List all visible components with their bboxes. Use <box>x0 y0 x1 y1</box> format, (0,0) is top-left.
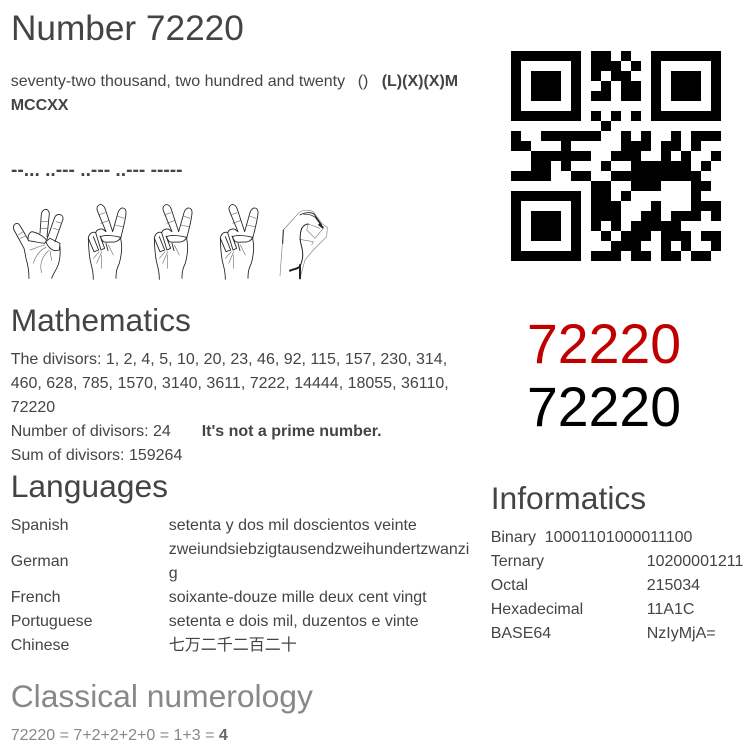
morse code: --... ..--- ..--- ..--- ----- <box>11 160 183 181</box>
table: languages: Portuguese <box>11 613 93 630</box>
icon: hand two, first <box>88 205 126 279</box>
table: informatics: 10001101000011100 <box>545 529 692 546</box>
table: informatics <box>491 529 743 642</box>
table: languages: setenta e dois mil, duzentos e vinte <box>169 613 419 630</box>
heading: informatics: Informatics <box>491 480 646 516</box>
number in words and roman numeral: MCCXX <box>11 97 68 114</box>
table: informatics: 215034 <box>647 577 700 594</box>
heading: mathematics: Mathematics <box>11 302 191 338</box>
table: languages: German <box>11 553 68 570</box>
table: languages: Chinese <box>11 637 69 654</box>
icon: hand seven <box>13 209 63 278</box>
text: divisors: Sum of divisors: 159264 <box>11 447 182 464</box>
title: Number 72220 <box>11 9 244 48</box>
text: divisors <box>11 351 449 464</box>
text: divisors: It's not a prime number. <box>202 423 382 440</box>
table: languages: 七万二千二百二十 <box>169 637 297 654</box>
heading: classical numerology: Classical numerology <box>11 678 313 714</box>
text: numerology sum: 72220 = 7+2+2+2+0 = 1+3 = 4 <box>11 727 228 744</box>
table: languages: French <box>11 589 60 606</box>
table: languages: setenta y dos mil doscientos veinte <box>169 517 417 534</box>
table: languages <box>11 517 469 654</box>
table: informatics: BASE64 <box>491 625 551 642</box>
table: informatics: Binary <box>491 529 536 546</box>
table: informatics: NzIyMjA= <box>647 625 716 642</box>
table: informatics: Hexadecimal <box>491 601 583 618</box>
table: languages: Spanish <box>11 517 69 534</box>
icon: sign language hands <box>12 204 328 280</box>
icon: hand two, third <box>220 205 258 279</box>
big number: red: 72220 <box>527 313 681 375</box>
table: languages: g <box>169 565 178 582</box>
number in words and roman numeral: (L)(X)(X)M <box>382 73 458 90</box>
icon: hand two, second <box>154 205 192 279</box>
number in words and roman numeral: seventy-two thousand, two hundred and twenty <box>11 73 345 90</box>
big number: black: 72220 <box>527 376 681 438</box>
text: divisors: 72220 <box>11 399 55 416</box>
table: informatics: Ternary <box>491 553 544 570</box>
icon: QR code <box>511 51 721 261</box>
table: languages: zweiundsiebzigtausendzweihundertzwanzi <box>169 541 469 558</box>
number in words and roman numeral: () <box>358 73 368 90</box>
heading: languages: Languages <box>11 468 168 504</box>
table: informatics: 10200001211 <box>647 553 743 570</box>
text: divisors: Number of divisors: 24 <box>11 423 171 440</box>
number in words and roman numeral <box>11 73 458 114</box>
icon: hand zero <box>280 210 327 278</box>
table: informatics: Octal <box>491 577 528 594</box>
table: informatics: 11A1C <box>647 601 694 618</box>
text: divisors: 460, 628, 785, 1570, 3140, 3611, 7222, 14444, 18055, 36110, <box>11 375 449 392</box>
text: divisors: The divisors: 1, 2, 4, 5, 10, 20, 23, 46, 92, 115, 157, 230, 314, <box>11 351 447 368</box>
table: languages: soixante-douze mille deux cent vingt <box>169 589 427 606</box>
